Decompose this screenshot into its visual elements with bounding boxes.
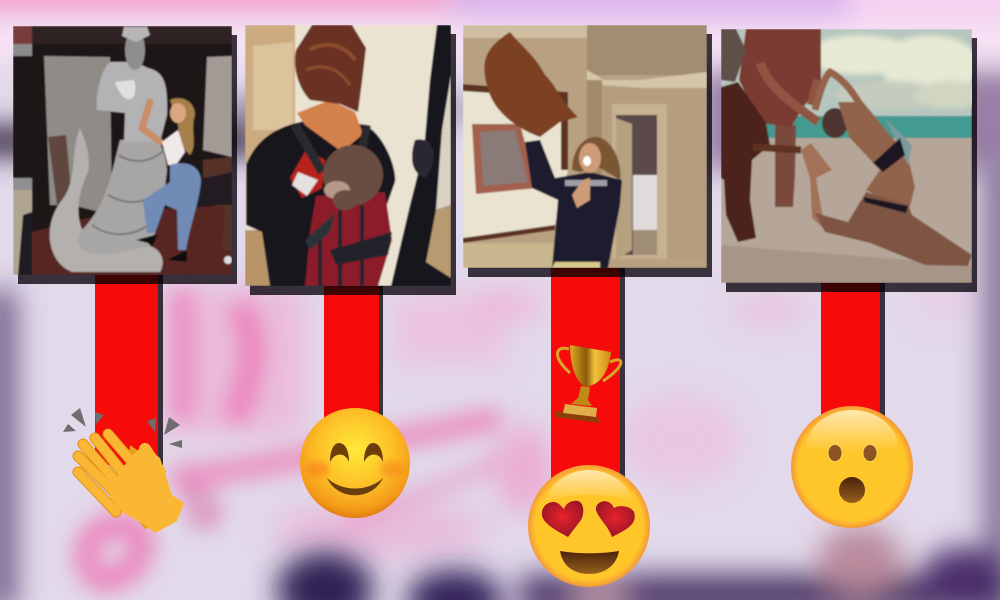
open mouth (839, 477, 865, 503)
woman hair (170, 98, 195, 155)
statue torso and arm (97, 62, 167, 142)
icon: clapping hands (63, 408, 184, 533)
heart left (542, 501, 583, 537)
panel: photo of woman with puppy in backpack (245, 25, 451, 286)
statue head and crown (125, 30, 145, 70)
woman arm (815, 72, 863, 110)
woman raised leg and foot (801, 143, 832, 230)
raised hand (572, 178, 590, 208)
trophy handles (557, 348, 621, 381)
standing man leg (775, 125, 796, 207)
trophy base (555, 411, 600, 423)
icon: smiling face (300, 408, 410, 518)
crouching man (721, 82, 770, 242)
open smile (560, 551, 619, 574)
crouching man arm (753, 147, 801, 150)
panel: photo of yoga pose on the beach (721, 29, 985, 283)
serpent body (78, 138, 167, 254)
bar 1 (95, 275, 163, 465)
woman bikini top (873, 138, 905, 172)
mirror frame (391, 25, 451, 286)
finger outlines (78, 434, 134, 512)
palm and wrist (110, 445, 184, 533)
wall art (472, 124, 537, 194)
forehead shine (545, 470, 633, 503)
rosy cheeks (306, 461, 330, 477)
bar 2 (324, 286, 383, 426)
rear hand (125, 445, 170, 529)
hood (297, 100, 363, 152)
bar 4 (821, 283, 885, 423)
standing man arms (760, 63, 818, 122)
woman arm (142, 102, 160, 142)
gas canister (48, 135, 72, 205)
icon: trophy (555, 345, 621, 423)
woman heels (136, 234, 187, 262)
standing man shirt (739, 29, 821, 127)
woman hair (572, 137, 620, 180)
forehead shine (806, 410, 898, 452)
wall art frame (463, 84, 568, 240)
leather couch (203, 157, 232, 250)
bar 3 (551, 268, 625, 480)
hair bun (295, 25, 366, 112)
woman torso (838, 102, 915, 213)
woman bikini bottom (864, 197, 908, 213)
jacket (246, 118, 395, 286)
backpack (305, 192, 392, 286)
jacket patch (290, 150, 325, 198)
smile (327, 478, 383, 495)
icon: surprised face (791, 406, 913, 528)
panel: photo of woman tossing hair (463, 25, 707, 268)
puppy (323, 145, 383, 205)
surprised eyes (828, 444, 842, 462)
icon: heart eyes face (528, 465, 650, 587)
trophy stem (571, 386, 592, 406)
smiling eyes (330, 443, 349, 462)
backpack strap (295, 125, 322, 172)
doorway (612, 104, 667, 259)
woman head and hair (822, 108, 848, 138)
clap spark marks (63, 408, 182, 448)
photo drop shadows (18, 34, 977, 295)
hair in hand (484, 32, 578, 137)
woman top (162, 130, 185, 165)
trophy cup (570, 345, 611, 386)
panel: photo of woman with serpent statue (13, 26, 232, 275)
fingers (78, 434, 134, 512)
woman face (170, 103, 186, 123)
sweatshirt (525, 140, 622, 268)
thumb (145, 449, 160, 472)
heart right (596, 501, 635, 537)
woman hips and thigh (815, 192, 972, 266)
woman face (579, 143, 601, 173)
serpent tail (50, 128, 163, 272)
woman jeans (143, 163, 201, 250)
